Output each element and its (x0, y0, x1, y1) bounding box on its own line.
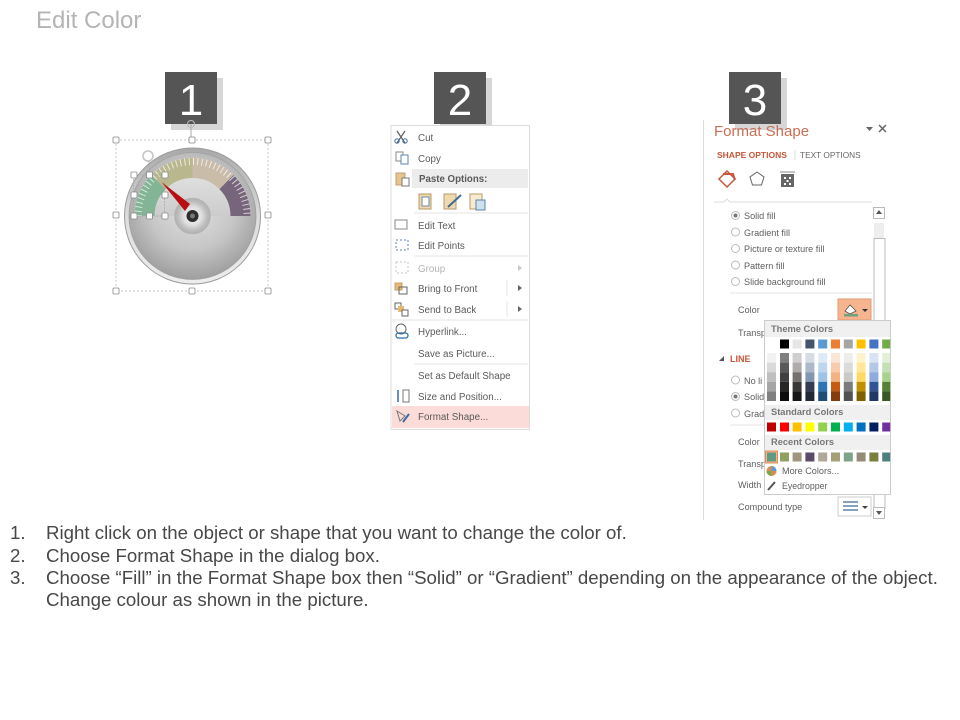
panel heading: Format Shape (714, 123, 809, 140)
instruction list: Choose “Fill” in the Format Shape box then “Solid” or “Gradient” depending on the appearance of the object. (46, 567, 938, 588)
gauge coloured zones (134, 158, 250, 216)
panel tabs: TEXT OPTIONS (800, 150, 861, 160)
step 3 number badge: 3 (743, 76, 767, 125)
recent color swatches (766, 451, 890, 463)
panel tabs (717, 150, 861, 160)
fill radio options: Gradient fill (744, 228, 790, 238)
step 2 number badge: 2 (448, 76, 472, 125)
selection frame (113, 120, 271, 294)
gauge needle (162, 182, 198, 222)
truncated option labels: Compound type (738, 502, 802, 512)
menu labels: Save as Picture... (418, 349, 495, 360)
gauge hub (174, 198, 210, 234)
fill radio options: Picture or texture fill (744, 244, 824, 254)
panel tab icons (714, 171, 872, 202)
standard colors heading: Standard Colors (771, 407, 843, 417)
menu labels: Set as Default Shape (418, 371, 511, 382)
shape edit handles on green zone (131, 151, 168, 219)
step 1 number badge: 1 (179, 76, 203, 125)
gauge dial (124, 148, 260, 284)
color row with button: Color (738, 305, 760, 315)
title: Edit Color (36, 7, 141, 34)
recent colors heading (765, 435, 890, 450)
fill radio options: Solid fill (744, 211, 775, 221)
truncated option labels: Color (738, 437, 760, 447)
recent colors heading: Recent Colors (771, 437, 834, 447)
instruction list: 3. (10, 567, 26, 588)
theme colors heading: Theme Colors (771, 324, 833, 334)
menu labels: Size and Position... (418, 392, 502, 403)
truncated option labels: Transp (738, 459, 766, 469)
standard color swatches (767, 422, 890, 432)
menu labels: Edit Points (418, 241, 465, 252)
menu labels: Group (418, 264, 446, 275)
step 1 number badge (165, 72, 223, 130)
panel close controls (866, 125, 886, 132)
truncated option labels: Transp (738, 328, 766, 338)
menu labels: Edit Text (418, 221, 456, 232)
format shape panel (704, 120, 890, 520)
paste options highlight (412, 169, 528, 188)
more colors option: More Colors... (782, 466, 839, 476)
context menu panel (391, 126, 530, 430)
menu labels: Send to Back (418, 305, 476, 316)
menu icons (395, 131, 522, 422)
compound type button (838, 497, 871, 516)
fill radio options (732, 211, 825, 287)
scrollbar (874, 208, 885, 518)
truncated option labels (719, 328, 802, 512)
instruction list: Right click on the object or shape that you want to change the color of. (46, 522, 627, 543)
instruction list (10, 522, 938, 610)
instruction list: Choose Format Shape in the dialog box. (46, 545, 380, 566)
step 3 number badge (729, 72, 787, 130)
step 2 number badge (434, 72, 492, 130)
fill radio options: Slide background fill (744, 277, 825, 287)
truncated option labels: Width (738, 480, 761, 490)
menu labels (418, 133, 511, 423)
truncated option labels: Gradi (744, 409, 766, 419)
menu labels: Copy (418, 154, 441, 165)
menu labels: Cut (418, 133, 434, 144)
theme colors heading (765, 321, 890, 337)
menu labels: Paste Options: (419, 174, 487, 185)
truncated option labels: LINE (730, 354, 751, 364)
color row with button (730, 293, 872, 320)
instruction list: Change colour as shown in the picture. (46, 589, 369, 610)
instruction list: 1. (10, 522, 26, 543)
menu separators (392, 213, 528, 364)
truncated option labels: Solid (744, 392, 764, 402)
instruction list: 2. (10, 545, 26, 566)
format shape highlight (392, 406, 529, 428)
theme color swatches (767, 340, 890, 401)
fill radio options: Pattern fill (744, 261, 784, 271)
gauge illustration with selection handles (113, 120, 271, 294)
standard colors heading (765, 405, 890, 420)
panel tabs: SHAPE OPTIONS (717, 150, 787, 160)
truncated option labels: No li (744, 376, 762, 386)
menu labels: Bring to Front (418, 284, 478, 295)
eyedropper option: Eyedropper (782, 481, 828, 491)
menu labels: Hyperlink... (418, 327, 467, 338)
color picker popup (764, 320, 890, 494)
menu labels: Format Shape... (418, 412, 488, 423)
